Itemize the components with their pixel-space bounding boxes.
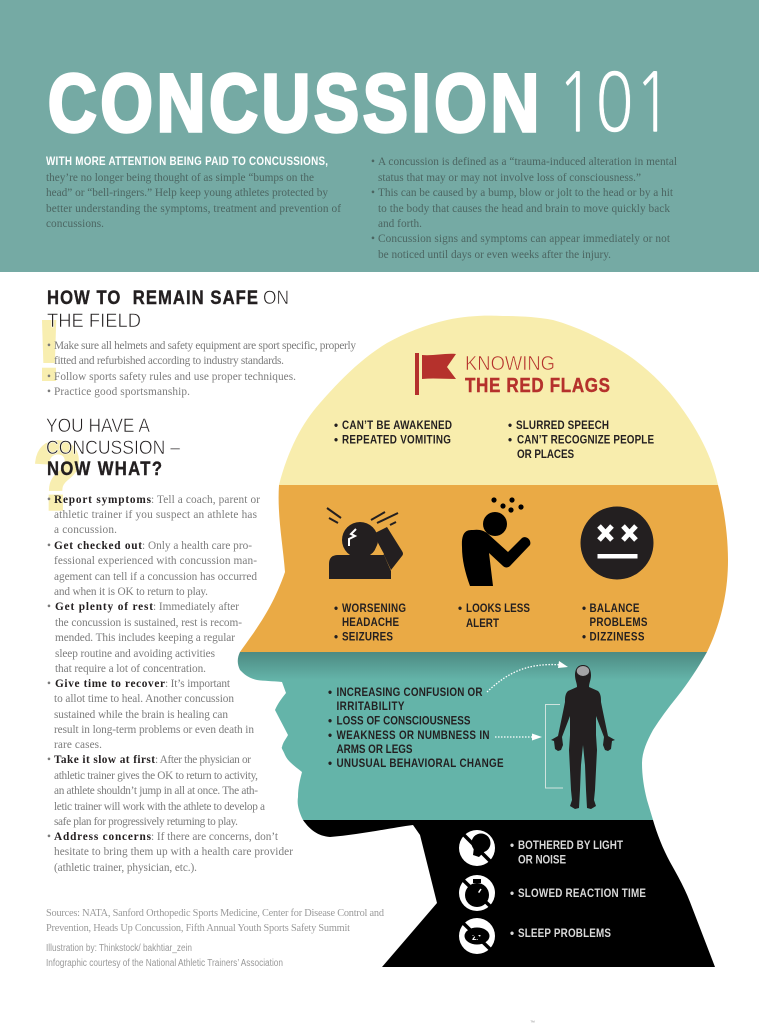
credits [46,943,283,969]
heading: how to remain safe: ON [263,287,289,309]
what to do list [47,494,293,874]
looks less alert list [458,602,530,630]
what to do list: • [47,601,51,613]
what to do list: athletic trainer gives the OK to return to activity, [54,770,258,782]
what to do list: letic trainer will work with the athlete to develop a [54,801,265,813]
red flags list left: • [334,419,338,432]
safety tips list: Follow sports safety rules and use proper techniques. [54,371,296,383]
what to do list: Take it slow at first [54,754,155,766]
icon: headache [327,508,403,579]
what to do list: • [47,494,51,506]
worsening headache list: SEIZURES [342,631,393,644]
intro text: WITH MORE ATTENTION BEING PAID TO CONCUSSIONS, [46,155,328,168]
light and noise symptom [510,839,623,867]
question mark watermark: ? [33,423,82,530]
light and noise symptom: OR NOISE [518,854,566,867]
safety tips list: • [47,340,51,352]
safety tips list: • [47,386,51,398]
sleep problems symptom: • [510,927,514,940]
exclamation mark watermark: ! [35,304,63,399]
balance problems list: BALANCE [590,602,639,615]
concussion facts: be noticed until days or even weeks after the injury. [378,249,611,261]
arrow: weakness to limbs [495,734,542,740]
concussion facts: A concussion is defined as a “trauma-induced alteration in mental [378,156,677,168]
bracket around limbs [546,704,563,788]
looks less alert list: LOOKS LESS [466,602,530,615]
red flags list left: CAN’T BE AWAKENED [342,419,452,432]
icon: no sleep: zz [472,932,482,942]
what to do list: Get checked out [54,540,142,552]
heading: how to remain safe [47,287,289,332]
credits: Infographic courtesy of the National Athletic Trainers’ Association [46,958,283,969]
what to do list: • [47,754,51,766]
head: face section (teal) [238,652,707,820]
confusion symptoms list: LOSS OF CONSCIOUSNESS [336,715,470,728]
what to do list: safe plan for progressively returning to play. [54,816,238,828]
safety tips list: Make sure all helmets and safety equipment are sport specific, properly [54,340,356,352]
what to do list: mended. This includes keeping a regular [55,632,235,644]
heading: how to remain safe: THE FIELD [47,310,141,332]
header band [0,0,759,272]
what to do list: that require a lot of concentration. [55,663,206,675]
heading: how to remain safe: HOW TO REMAIN SAFE [47,287,258,308]
concussion facts [371,156,677,261]
what to do list: Report symptoms [54,494,152,506]
red flags list left [334,419,452,447]
worsening headache list: HEADACHE [342,616,399,629]
red flags list right: SLURRED SPEECH [516,419,609,432]
confusion symptoms list: IRRITABILITY [336,700,405,713]
heading: you have a concussion: YOU HAVE A [46,415,151,437]
safety tips list: fitted and refurbished according to industry standards. [54,355,284,367]
heading: knowing the red flags: THE RED FLAGS [465,374,610,396]
what to do list: : Tell a coach, parent or [151,494,260,506]
what to do list: and when it is OK to return to play. [54,586,208,598]
what to do list: sleep routine and avoiding activities [55,648,215,660]
confusion symptoms list: • [328,729,332,742]
what to do list: Get plenty of rest [55,601,153,613]
icon: no sleep [459,918,495,954]
worsening headache list: • [334,630,338,644]
light and noise symptom: • [510,839,514,852]
what to do list: (athletic trainer, physician, etc.). [54,862,197,874]
title: CONCUSSION [48,57,539,148]
head: forehead section (orange) [240,485,728,652]
confusion symptoms list: • [328,686,332,699]
confusion symptoms list [328,686,504,770]
balance problems list: • [582,602,586,615]
what to do list: hesitate to bring them up with a health care provider [54,846,293,858]
icon: dazed person [462,497,530,586]
sleep problems symptom: SLEEP PROBLEMS [518,927,611,940]
safety tips list: Practice good sportsmanship. [54,386,190,398]
arrow: confusion to brain [487,661,568,692]
what to do list: agement can tell if a concussion has occurred [54,571,257,583]
concussion facts: • [371,156,375,168]
confusion symptoms list: UNUSUAL BEHAVIORAL CHANGE [336,757,504,770]
red flags list left: REPEATED VOMITING [342,434,451,447]
balance problems list [582,602,647,644]
red flags list left: • [334,434,338,446]
safety tips list [47,340,356,398]
light and noise symptom: BOTHERED BY LIGHT [518,839,623,852]
red flags list right: • [508,419,512,432]
looks less alert list: • [458,602,462,615]
red flags list right: CAN’T RECOGNIZE PEOPLE [517,434,654,447]
what to do list: : If there are concerns, don’t [151,831,279,843]
confusion symptoms list: WEAKNESS OR NUMBNESS IN [336,729,490,742]
worsening headache list [334,602,406,644]
what to do list: fessional experienced with concussion man- [54,555,257,567]
balance problems list: • [582,630,586,644]
head: neck section (black) [303,820,715,967]
heading: you have a concussion [46,415,180,479]
what to do list: rare cases. [54,739,102,751]
intro text: head” or “bell-ringers.” Help keep young athletes protected by [46,187,328,199]
title: 101 [556,62,672,144]
icon: no stopwatch [459,875,495,911]
balance problems list: PROBLEMS [590,616,647,629]
concussion facts: • [371,187,375,199]
what to do list: • [47,831,51,843]
concussion facts: This can be caused by a bump, blow or jolt to the head or by a hit [378,187,674,199]
confusion symptoms list: • [328,757,332,770]
what to do list: : Only a health care pro- [142,540,252,552]
intro text: they’re no longer being thought of as simple “bumps on the [46,172,314,184]
heading: you have a concussion: NOW WHAT? [47,458,162,479]
confusion symptoms list: • [328,714,332,728]
sources: Prevention, Heads Up Concussion, Fifth Annual Youth Sports Safety Summit [46,923,350,934]
sources [46,908,385,934]
what to do list: : It’s important [165,678,231,690]
what to do list: to allot time to heal. Another concussion [54,693,234,705]
slowed reaction symptom: SLOWED REACTION TIME [518,887,646,900]
red flags list right: OR PLACES [517,448,574,461]
confusion symptoms list: INCREASING CONFUSION OR [336,686,483,699]
concussion facts: and forth. [378,218,422,230]
safety tips list: • [47,371,51,383]
credits: Illustration by: Thinkstock/ bakhtiar_zein [46,943,192,954]
what to do list: : Immediately after [153,601,239,613]
red flags list right [508,419,654,461]
concussion facts: status that may or may not involve loss of consciousness.” [378,172,641,184]
concussion facts: Concussion signs and symptoms can appear immediately or not [378,233,671,245]
slowed reaction symptom: • [510,887,514,900]
heading: knowing the red flags [465,353,610,396]
confusion symptoms list: ARMS OR LEGS [336,743,412,756]
what to do list: a concussion. [54,524,117,536]
intro text: better understanding the symptoms, treatment and prevention of [46,203,341,215]
red flags list right: • [508,434,512,446]
worsening headache list: WORSENING [342,602,406,615]
icon: human figure [551,665,615,809]
worsening headache list: • [334,602,338,615]
intro text [46,155,341,230]
head: crown section (yellow) [279,316,718,485]
what to do list: sustained while the brain is healing can [54,709,228,721]
what to do list: • [47,678,51,690]
concussion facts: to the body that causes the head and brain to move quickly back [378,203,670,215]
what to do list: the concussion is sustained, rest is recom- [55,617,242,629]
icon: dizzy face [580,506,654,580]
balance problems list: DIZZINESS [590,631,644,644]
concussion facts: • [371,233,375,245]
what to do list: athletic trainer if you suspect an athlete has [54,509,257,521]
what to do list: an athlete shouldn’t jump in all at once. The ath- [54,785,258,797]
what to do list: Give time to recover [55,678,165,690]
what to do list: result in long-term problems or even death in [54,724,254,736]
icon: no light [459,830,495,866]
icon: red flag [415,353,456,395]
sources: Sources: NATA, Sanford Orthopedic Sports Medicine, Center for Disease Control and [46,908,385,919]
what to do list: • [47,540,51,552]
heading: you have a concussion: CONCUSSION – [46,437,180,459]
what to do list: : After the physician or [155,754,251,766]
what to do list: Address concerns [54,831,152,843]
intro text: concussions. [46,218,104,230]
looks less alert list: ALERT [466,617,499,630]
heading: knowing the red flags: KNOWING [465,353,555,375]
